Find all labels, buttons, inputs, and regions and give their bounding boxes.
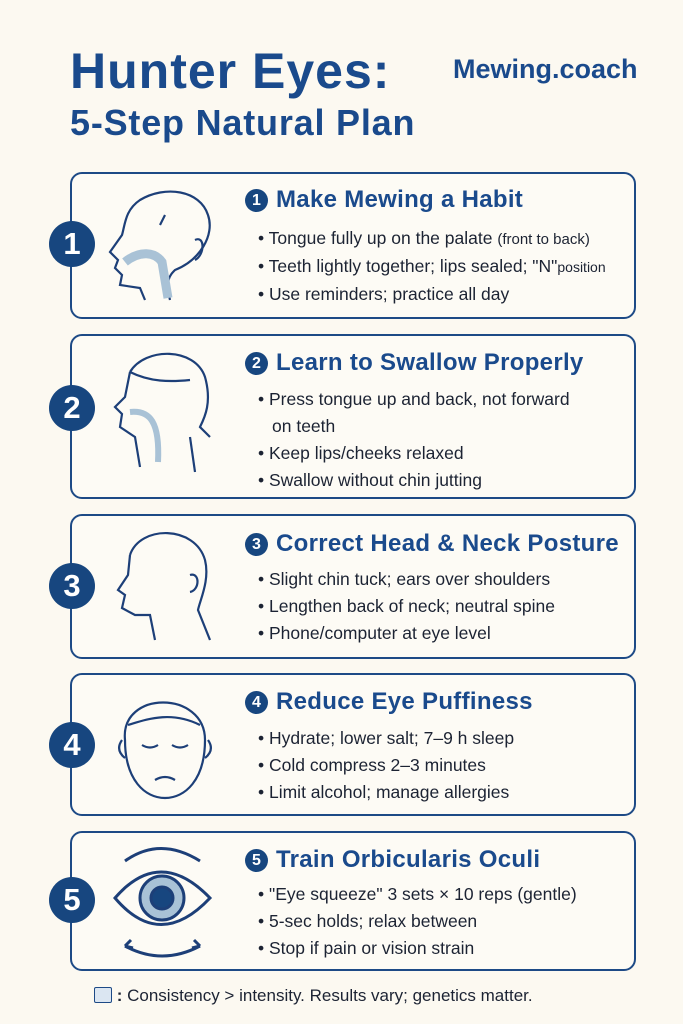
bullets 1 [258, 228, 606, 304]
panel: step 5 [70, 831, 636, 971]
heading 4: 4 [252, 694, 261, 711]
panel: step 3 [70, 514, 636, 659]
bullets 1: • Use reminders; practice all day [258, 284, 509, 304]
number 3: 3 [63, 568, 81, 603]
number 1: 1 [63, 226, 81, 261]
bullets 3: • Phone/computer at eye level [258, 623, 491, 643]
panel: step 2 [70, 334, 636, 499]
icon: head posture [116, 532, 211, 640]
bullets 5 [258, 884, 577, 958]
heading 2: Learn to Swallow Properly [276, 349, 584, 376]
heading 4: Reduce Eye Puffiness [276, 688, 533, 715]
heading 2: 2 [252, 355, 261, 372]
bullets 1: • Teeth lightly together; lips sealed; "N"position [258, 256, 606, 276]
heading 3: Correct Head & Neck Posture [276, 530, 619, 557]
bullets 2: on teeth [272, 416, 335, 436]
subtitle: 5-Step Natural Plan [70, 102, 415, 143]
heading 5: Train Orbicularis Oculi [276, 846, 540, 873]
bullets 4: • Cold compress 2–3 minutes [258, 755, 486, 775]
bullets 2: • Keep lips/cheeks relaxed [258, 443, 464, 463]
bullets 1: • Tongue fully up on the palate (front to back) [258, 228, 590, 248]
icon: head swallow [114, 352, 211, 472]
title: Hunter Eyes: [70, 43, 390, 99]
footer note: : Consistency > intensity. Results vary; genetics matter. [117, 986, 533, 1005]
panel: step 1 [70, 172, 636, 319]
icon: head side with tongue [108, 190, 211, 300]
bullets 2 [258, 389, 570, 490]
bullets 5: • 5-sec holds; relax between [258, 911, 477, 931]
bullets 2: • Press tongue up and back, not forward [258, 389, 570, 409]
bullets 5: • "Eye squeeze" 3 sets × 10 reps (gentle) [258, 884, 577, 904]
number 2: 2 [63, 390, 81, 425]
number 4 [49, 722, 95, 768]
number 5 [49, 877, 95, 923]
heading 5: 5 [252, 852, 261, 869]
bullets 3: • Lengthen back of neck; neutral spine [258, 596, 555, 616]
bullets 4: • Hydrate; lower salt; 7–9 h sleep [258, 728, 514, 748]
number 3 [49, 563, 95, 609]
bullets 5: • Stop if pain or vision strain [258, 938, 474, 958]
number 2 [49, 385, 95, 431]
number 1 [49, 221, 95, 267]
heading 1: 1 [252, 192, 261, 209]
bullets 3 [258, 569, 555, 643]
number 5: 5 [63, 882, 81, 917]
icon: face front [118, 701, 212, 800]
bullets 2: • Swallow without chin jutting [258, 470, 482, 490]
brand: Mewing.coach [453, 54, 638, 84]
icon: eye [113, 847, 212, 958]
number 4: 4 [63, 727, 81, 762]
bullets 3: • Slight chin tuck; ears over shoulders [258, 569, 550, 589]
heading 3: 3 [252, 536, 261, 553]
panel: step 4 [70, 673, 636, 816]
heading 1: Make Mewing a Habit [276, 186, 523, 213]
bullets 4 [258, 728, 514, 802]
bullets 4: • Limit alcohol; manage allergies [258, 782, 509, 802]
